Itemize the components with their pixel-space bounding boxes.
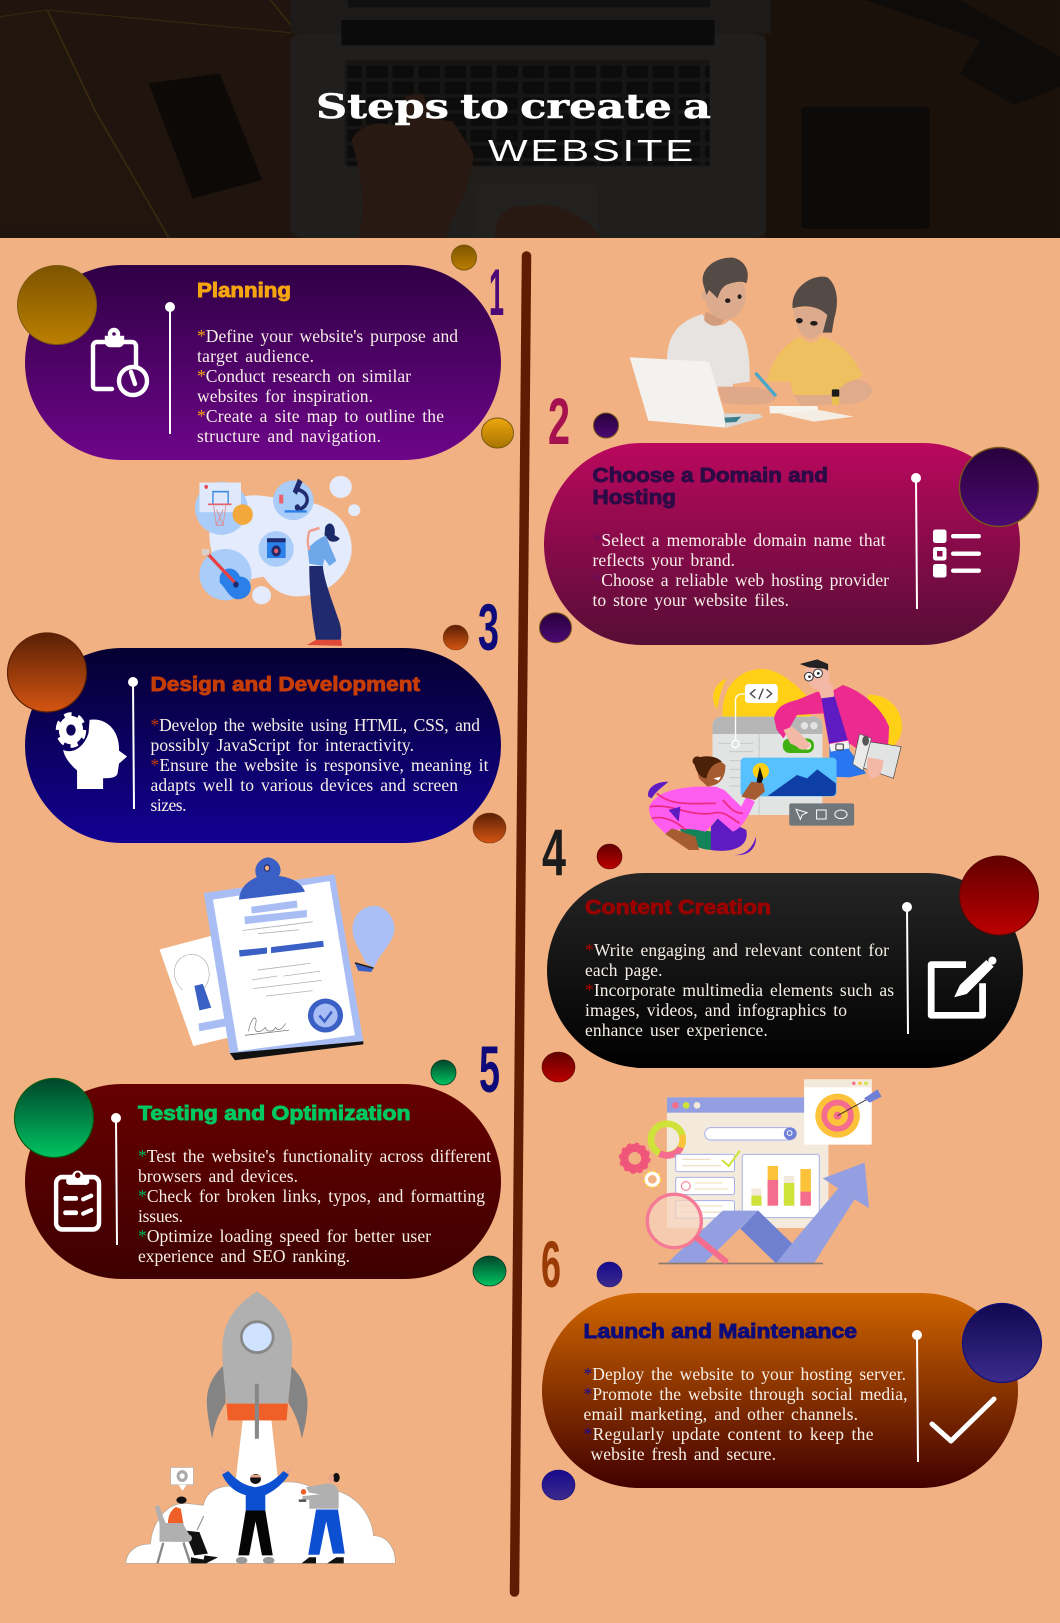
heading	[592, 464, 828, 509]
body text: target audience.	[197, 346, 314, 366]
accent circle small bottom	[473, 1256, 506, 1286]
body text: each page.	[585, 960, 662, 980]
body text	[138, 1146, 491, 1266]
step number 3: 3	[478, 590, 499, 664]
accent circle small bottom	[473, 813, 506, 843]
body text: experience and SEO ranking.	[138, 1246, 350, 1266]
title line 2: WEBSITE	[488, 133, 696, 168]
icon: clipboard with timer	[93, 330, 147, 395]
accent circle small top	[443, 625, 468, 650]
body text	[585, 940, 894, 1040]
vertical pin line	[116, 1118, 117, 1245]
body text: reflects your brand.	[592, 550, 735, 570]
accent circle small bottom	[540, 613, 572, 643]
body text: *Deploy the website to your hosting server.	[584, 1364, 906, 1384]
accent circle large	[14, 1078, 94, 1158]
body text: *Define your website's purpose and	[197, 326, 458, 346]
step number 5: 5	[479, 1032, 500, 1106]
body text: *Regularly update content to keep the	[584, 1424, 874, 1444]
illustration: woman thinking about hobbies	[195, 476, 360, 646]
illustration: clipboard and light bulb	[160, 857, 395, 1060]
body text: *Write engaging and relevant content for	[585, 940, 889, 960]
body text	[592, 530, 889, 610]
accent circle large	[960, 856, 1038, 935]
pin dot	[911, 473, 921, 483]
pin dot	[912, 1330, 922, 1340]
body text: website fresh and secure.	[590, 1444, 776, 1464]
body text: possibly JavaScript for interactivity.	[150, 735, 414, 755]
illustration: analytics window and rising arrow	[620, 1079, 882, 1264]
body text: *Test the website's functionality across different	[138, 1146, 491, 1166]
body text	[197, 326, 458, 446]
accent circle small top	[594, 413, 618, 438]
accent circle small bottom	[542, 1470, 575, 1500]
heading: Planning	[197, 279, 291, 302]
heading: Testing and Optimization	[138, 1102, 410, 1125]
body text: *Create a site map to outline the	[197, 406, 444, 426]
pin dot	[128, 677, 138, 687]
heading: Hosting	[592, 486, 676, 509]
body text: *Incorporate multimedia elements such as	[585, 980, 894, 1000]
title: Steps to create a WEBSITE	[316, 87, 711, 168]
vertical pin line	[169, 307, 171, 434]
illustration: developers building a web page	[648, 659, 902, 855]
body text: *Choose a reliable web hosting provider	[592, 570, 889, 590]
panel: step 5 testing and optimization	[14, 1032, 506, 1286]
body text: *Check for broken links, typos, and formatting	[138, 1186, 485, 1206]
step number 6: 6	[541, 1227, 561, 1301]
icon: check mark	[932, 1399, 994, 1441]
panel: step 6 launch and maintenance	[541, 1227, 1042, 1500]
pin dot	[165, 302, 175, 312]
vertical pin line	[917, 1335, 918, 1462]
icon: checklist	[933, 530, 981, 578]
accent circle small top	[597, 1262, 622, 1287]
heading: Design and Development	[150, 673, 420, 696]
pin dot	[111, 1113, 121, 1123]
body text: *Ensure the website is responsive, meaning it	[150, 755, 489, 775]
illustration: two people with laptop	[630, 258, 872, 428]
body text: browsers and devices.	[138, 1166, 298, 1186]
accent circle small bottom	[482, 418, 514, 448]
icon: edit note	[931, 957, 996, 1015]
panel: step 1 planning	[18, 245, 514, 460]
accent circle large	[8, 633, 86, 712]
panel: step 3 design and development	[8, 590, 506, 843]
heading: Choose a Domain and	[592, 464, 828, 487]
heading: Launch and Maintenance	[584, 1320, 857, 1343]
body text: sizes.	[150, 795, 186, 815]
accent circle large	[18, 266, 96, 344]
accent circle small top	[597, 844, 622, 869]
body text: *Promote the website through social media,	[584, 1384, 908, 1404]
body text: *Optimize loading speed for better user	[138, 1226, 431, 1246]
body text: issues.	[138, 1206, 183, 1226]
accent circle large	[960, 448, 1038, 526]
header photo banner	[0, 0, 1060, 238]
centre timeline divider	[514, 256, 526, 1592]
body text: enhance user experience.	[585, 1020, 768, 1040]
body text: *Conduct research on similar	[197, 366, 411, 386]
body text: images, videos, and infographics to	[585, 1000, 847, 1020]
accent circle small top	[431, 1060, 456, 1085]
icon: clipboard checklist	[56, 1171, 99, 1229]
accent circle small bottom	[542, 1052, 575, 1082]
icon: head with gear	[57, 714, 127, 789]
panel: step 1 planning: 1	[489, 255, 504, 329]
body text: *Develop the website using HTML, CSS, and	[150, 715, 480, 735]
heading: Content Creation	[585, 896, 771, 919]
illustration: rocket launch with team	[126, 1292, 395, 1564]
panel: step 2 domain and hosting	[540, 384, 1038, 645]
title line 1: Steps to create a	[316, 87, 711, 127]
body text: websites for inspiration.	[197, 386, 373, 406]
body text	[584, 1364, 908, 1464]
vertical pin line	[916, 478, 917, 609]
body text: *Select a memorable domain name that	[592, 530, 886, 550]
accent circle small top	[452, 245, 476, 270]
panel: step 4 content creation	[542, 815, 1038, 1082]
accent circle large	[962, 1304, 1042, 1382]
step number 2: 2	[548, 384, 570, 458]
vertical pin line	[907, 907, 908, 1034]
body text: structure and navigation.	[197, 426, 381, 446]
pin dot	[902, 902, 912, 912]
step number 4: 4	[542, 815, 566, 889]
body text: email marketing, and other channels.	[584, 1404, 858, 1424]
vertical pin line	[133, 682, 134, 809]
body text: to store your website files.	[592, 590, 789, 610]
body text: adapts well to various devices and screen	[150, 775, 458, 795]
body text	[150, 715, 489, 815]
